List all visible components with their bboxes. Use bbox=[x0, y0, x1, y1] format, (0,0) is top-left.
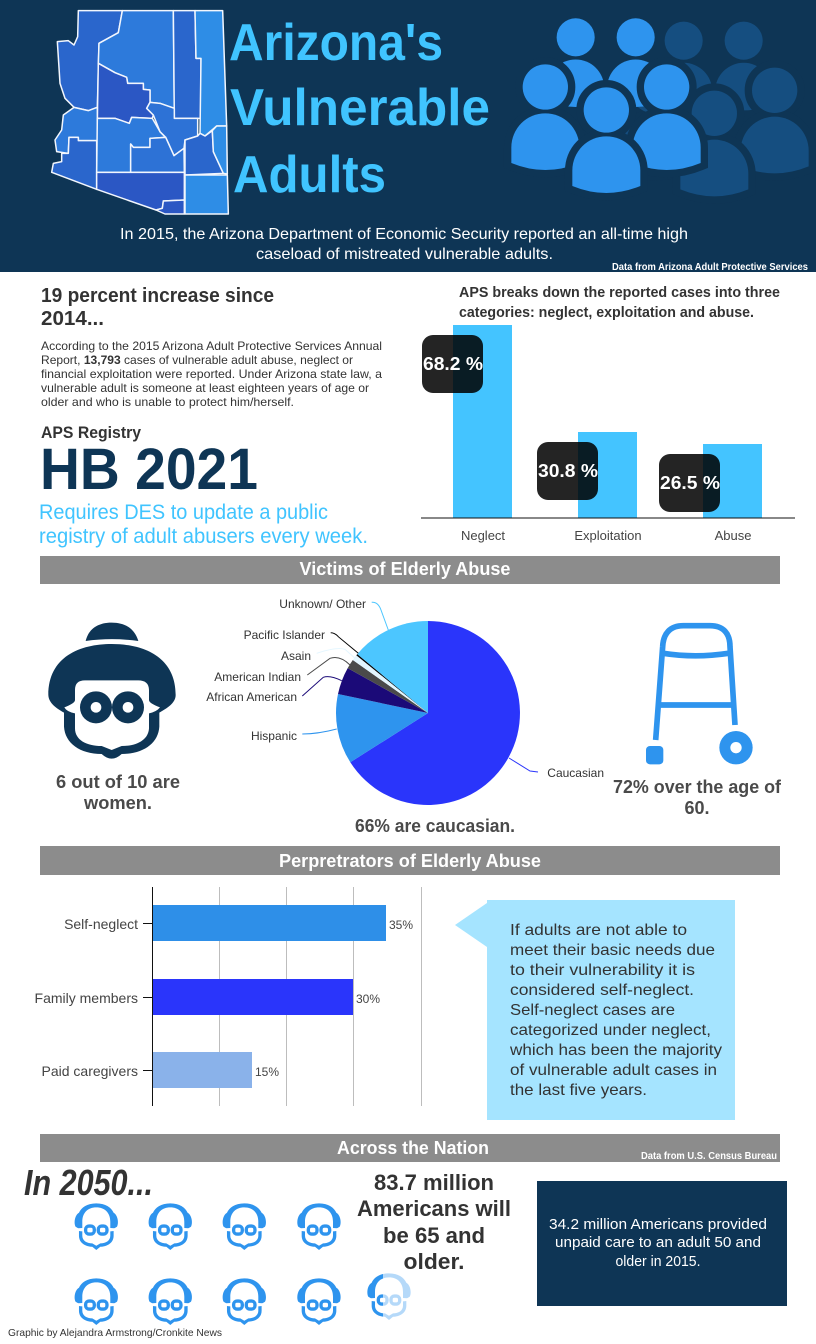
tooltip: abuse bbox=[659, 454, 720, 512]
heading: 2014... bbox=[41, 308, 104, 330]
title: Vulnerable bbox=[230, 79, 490, 137]
paragraph: vulnerable adult is someone at least eighteen years of age or bbox=[41, 381, 369, 395]
stat: 83.7 million bbox=[357, 1170, 511, 1274]
registry requirement: Requires DES to update a public bbox=[39, 501, 328, 524]
bar chart: perpetrators bbox=[35, 887, 422, 1106]
bar chart: Abuse bbox=[715, 528, 751, 543]
caption: women: women. bbox=[83, 793, 152, 813]
icon: bright crowd bbox=[511, 18, 701, 193]
pie labels: Asain bbox=[281, 649, 311, 663]
callout: unpaid care: 34.2 million Americans provided bbox=[549, 1217, 767, 1233]
heading: 19 percent increase since bbox=[41, 285, 274, 307]
chart heading bbox=[459, 285, 780, 321]
callout: self-neglect bbox=[455, 900, 735, 1120]
stat: 83.7 million: be 65 and bbox=[383, 1223, 485, 1248]
pie labels: Caucasian bbox=[547, 766, 604, 780]
panel: header bbox=[0, 0, 816, 273]
APS registry label: APS Registry bbox=[41, 423, 142, 442]
callout: unpaid care: older in 2015. bbox=[616, 1254, 700, 1270]
credit: Graphic by Alejandra Armstrong/Cronkite News bbox=[8, 1327, 222, 1339]
heading: Perpretrators of Elderly Abuse bbox=[40, 846, 780, 875]
callout: self-neglect: to their vulnerability it is bbox=[510, 962, 695, 979]
callout: self-neglect: categorized under neglect, bbox=[510, 1022, 711, 1039]
tooltip: exploitation: 30.8 % bbox=[538, 461, 598, 481]
tooltip: neglect bbox=[422, 335, 483, 393]
title: Arizona's bbox=[229, 14, 443, 72]
callout: self-neglect: the last five years. bbox=[510, 1082, 647, 1099]
icon: crowd of people bbox=[511, 18, 809, 196]
tooltip: neglect: 68.2 % bbox=[423, 354, 483, 374]
heading: Perpretrators of Elderly Abuse: Perpretrators of Elderly Abuse bbox=[279, 851, 541, 871]
In 2050 heading: In 2050... bbox=[24, 1162, 153, 1203]
callout: self-neglect: Self-neglect cases are bbox=[510, 1002, 675, 1019]
stat: 83.7 million: older. bbox=[404, 1249, 464, 1274]
icon row: elderly people bbox=[75, 1203, 411, 1325]
pie labels: African American bbox=[206, 690, 297, 704]
icon: walker bbox=[646, 626, 753, 764]
bar chart: perpetrators: Self-neglect bbox=[64, 916, 138, 932]
title bbox=[229, 14, 490, 204]
caption: age bbox=[613, 777, 782, 818]
stat: 83.7 million: Americans will bbox=[357, 1196, 511, 1221]
HB 2021: HB 2021 bbox=[40, 437, 258, 502]
bar chart bbox=[421, 325, 795, 543]
heading bbox=[41, 285, 274, 330]
bar chart: perpetrators: 35% bbox=[389, 918, 413, 932]
callout: self-neglect: meet their basic needs due bbox=[510, 942, 715, 959]
heading: Across the Nation: Across the Nation bbox=[337, 1138, 489, 1158]
paragraph: According to the 2015 Arizona Adult Protective Services Annual bbox=[41, 339, 382, 353]
bar chart: Exploitation bbox=[574, 528, 642, 543]
icon: faded crowd bbox=[619, 22, 809, 196]
callout: self-neglect: of vulnerable adult cases in bbox=[510, 1062, 717, 1079]
title: Adults bbox=[233, 146, 386, 204]
callout: self-neglect: considered self-neglect. bbox=[510, 982, 694, 999]
tooltip: exploitation bbox=[537, 442, 598, 500]
callout: self-neglect: If adults are not able to bbox=[510, 922, 687, 939]
heading: Across the Nation: Data from U.S. Census Bureau bbox=[641, 1151, 777, 1162]
heading: Victims of Elderly Abuse bbox=[40, 556, 780, 584]
callout: self-neglect: which has been the majority bbox=[509, 1042, 722, 1059]
pie labels: Hispanic bbox=[251, 729, 297, 743]
bar chart: perpetrators: 15% bbox=[255, 1065, 279, 1079]
paragraph: older and who is unable to protect him/herself. bbox=[41, 395, 294, 409]
header summary: In 2015, the Arizona Department of Economic Security reported an all-time high bbox=[120, 226, 688, 243]
callout: unpaid care: unpaid care to an adult 50 and bbox=[555, 1235, 761, 1251]
leader lines bbox=[302, 602, 538, 772]
bar chart: perpetrators: Paid caregivers bbox=[42, 1063, 138, 1079]
callout: unpaid care bbox=[537, 1181, 787, 1306]
caption: age: 72% over the age of bbox=[613, 777, 782, 797]
header summary bbox=[120, 226, 688, 263]
bar chart: perpetrators: Family members bbox=[35, 990, 138, 1006]
heading: Across the Nation bbox=[40, 1134, 780, 1162]
caption: women: 6 out of 10 are bbox=[56, 772, 180, 792]
chart heading: APS breaks down the reported cases into three bbox=[459, 285, 780, 301]
paragraph: financial exploitation were reported. Under Arizona state law, a bbox=[41, 367, 382, 381]
caption: women bbox=[56, 772, 180, 813]
pie labels: Unknown/ Other bbox=[279, 597, 366, 611]
panel: case categories bbox=[421, 285, 795, 543]
chart heading: categories: neglect, exploitation and abuse. bbox=[459, 305, 754, 321]
registry requirement bbox=[39, 501, 368, 548]
pie labels: Pacific Islander bbox=[244, 628, 325, 642]
paragraph: Report, 13,793 cases of vulnerable adult abuse, neglect or bbox=[41, 353, 353, 367]
icon: partial elderly person bbox=[367, 1273, 411, 1320]
pie labels bbox=[206, 597, 604, 780]
heading: Victims of Elderly Abuse: Victims of Elderly Abuse bbox=[300, 559, 510, 579]
paragraph bbox=[41, 339, 382, 409]
pie labels: American Indian bbox=[214, 670, 301, 684]
caption: caucasian: 66% are caucasian. bbox=[355, 816, 515, 836]
panel: 19 percent increase bbox=[39, 285, 382, 548]
pie chart bbox=[206, 597, 604, 805]
icon: elderly woman bbox=[48, 623, 176, 759]
registry requirement: registry of adult abusers every week. bbox=[39, 525, 368, 548]
icon: Arizona county map bbox=[52, 11, 228, 214]
bar chart: perpetrators: 30% bbox=[356, 992, 380, 1006]
caption: age: 60. bbox=[684, 798, 710, 818]
stat: 83.7 million: 83.7 million bbox=[374, 1170, 494, 1195]
tooltip: abuse: 26.5 % bbox=[660, 473, 720, 493]
header summary: caseload of mistreated vulnerable adults. bbox=[256, 246, 553, 263]
bar chart: Neglect bbox=[461, 528, 505, 543]
